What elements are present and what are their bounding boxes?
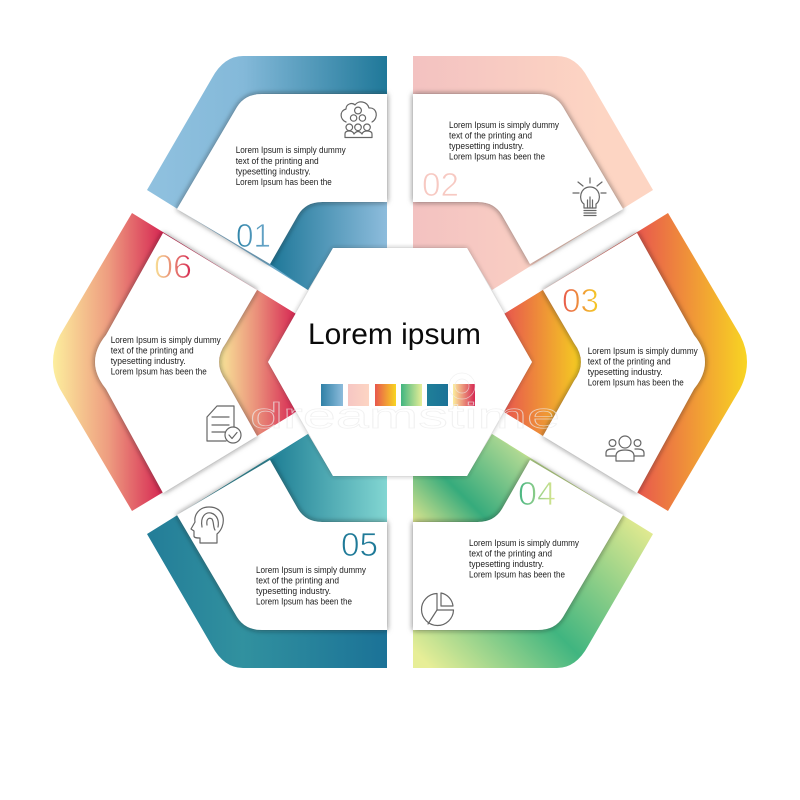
text block 02: Lorem Ipsum is simply dummy [449, 120, 560, 130]
number 03: 03 [562, 282, 599, 319]
band: inner blue [270, 202, 387, 290]
title: Lorem ipsum [308, 318, 481, 351]
band: outer crimson [53, 213, 296, 511]
icon: pie chart [422, 593, 454, 625]
band: inner crimson [219, 290, 296, 436]
text block 04 [469, 538, 580, 580]
band: outer green [413, 434, 653, 668]
text block 05: typesetting industry. [256, 586, 331, 596]
text block 01: text of the printing and [236, 156, 319, 166]
text block 02 [449, 120, 560, 162]
text block 02: text of the printing and [449, 130, 532, 140]
text block 04: text of the printing and [469, 548, 552, 558]
band: inner green [413, 434, 530, 522]
icon: cloud with people [341, 102, 376, 138]
text block 05 [256, 565, 367, 606]
panel 04: bottom-right segment [413, 434, 653, 668]
band: outer orange [504, 213, 747, 511]
text block 03: Lorem Ipsum has been the [588, 378, 684, 388]
number 01: 01 [236, 217, 271, 254]
icon: group of people [606, 436, 644, 461]
text block 02: Lorem Ipsum has been the [449, 152, 545, 162]
text block 06 [111, 335, 221, 376]
band: outer teal [147, 434, 387, 668]
panel 05: bottom-left segment [147, 434, 387, 668]
text block 06: typesetting industry. [111, 356, 186, 366]
color swatches legend [321, 384, 475, 406]
text block 03: text of the printing and [588, 356, 671, 366]
card: 05 [177, 460, 387, 630]
text block 03: typesetting industry. [588, 367, 663, 377]
text block 01: Lorem Ipsum is simply dummy [236, 145, 346, 155]
text block 04: typesetting industry. [469, 559, 544, 569]
card: 01 [177, 94, 387, 264]
number 04: 04 [518, 475, 556, 512]
panel 01: top-left segment [147, 56, 387, 290]
number 05: 05 [341, 526, 378, 563]
band: inner teal [270, 434, 387, 522]
text block 06: Lorem Ipsum is simply dummy [111, 335, 221, 345]
number 06: 06 [154, 248, 192, 285]
card: 02 [413, 94, 623, 264]
icon: light bulb [573, 178, 606, 216]
band: inner orange [504, 290, 581, 436]
text block 03 [588, 346, 698, 388]
panel 03: right segment [504, 213, 747, 511]
card: 04 [413, 460, 623, 630]
text block 05: Lorem Ipsum is simply dummy [256, 565, 367, 575]
panel 02: top-right segment [413, 56, 653, 290]
icon: head with fingerprint [191, 507, 223, 543]
text block 06: text of the printing and [111, 346, 194, 356]
text block 01: typesetting industry. [236, 166, 311, 176]
center hexagon [268, 248, 532, 476]
watermark: dreamstime [250, 395, 560, 436]
text block 04: Lorem Ipsum has been the [469, 570, 565, 580]
panel 06: left segment [53, 213, 296, 511]
text block 02: typesetting industry. [449, 141, 524, 151]
card: 06 [95, 233, 257, 493]
text block 01 [236, 145, 346, 187]
text block 05: text of the printing and [256, 576, 339, 586]
watermark [250, 373, 560, 436]
band: outer blue [147, 56, 387, 290]
band: pink [413, 56, 653, 290]
text block 05: Lorem Ipsum has been the [256, 596, 352, 606]
card: 03 [543, 233, 705, 493]
text block 06: Lorem Ipsum has been the [111, 366, 207, 376]
text block 03: Lorem Ipsum is simply dummy [588, 346, 698, 356]
icon: document with check [207, 406, 241, 443]
number 02: 02 [422, 166, 459, 203]
text block 01: Lorem Ipsum has been the [236, 177, 332, 187]
text block 04: Lorem Ipsum is simply dummy [469, 538, 580, 548]
